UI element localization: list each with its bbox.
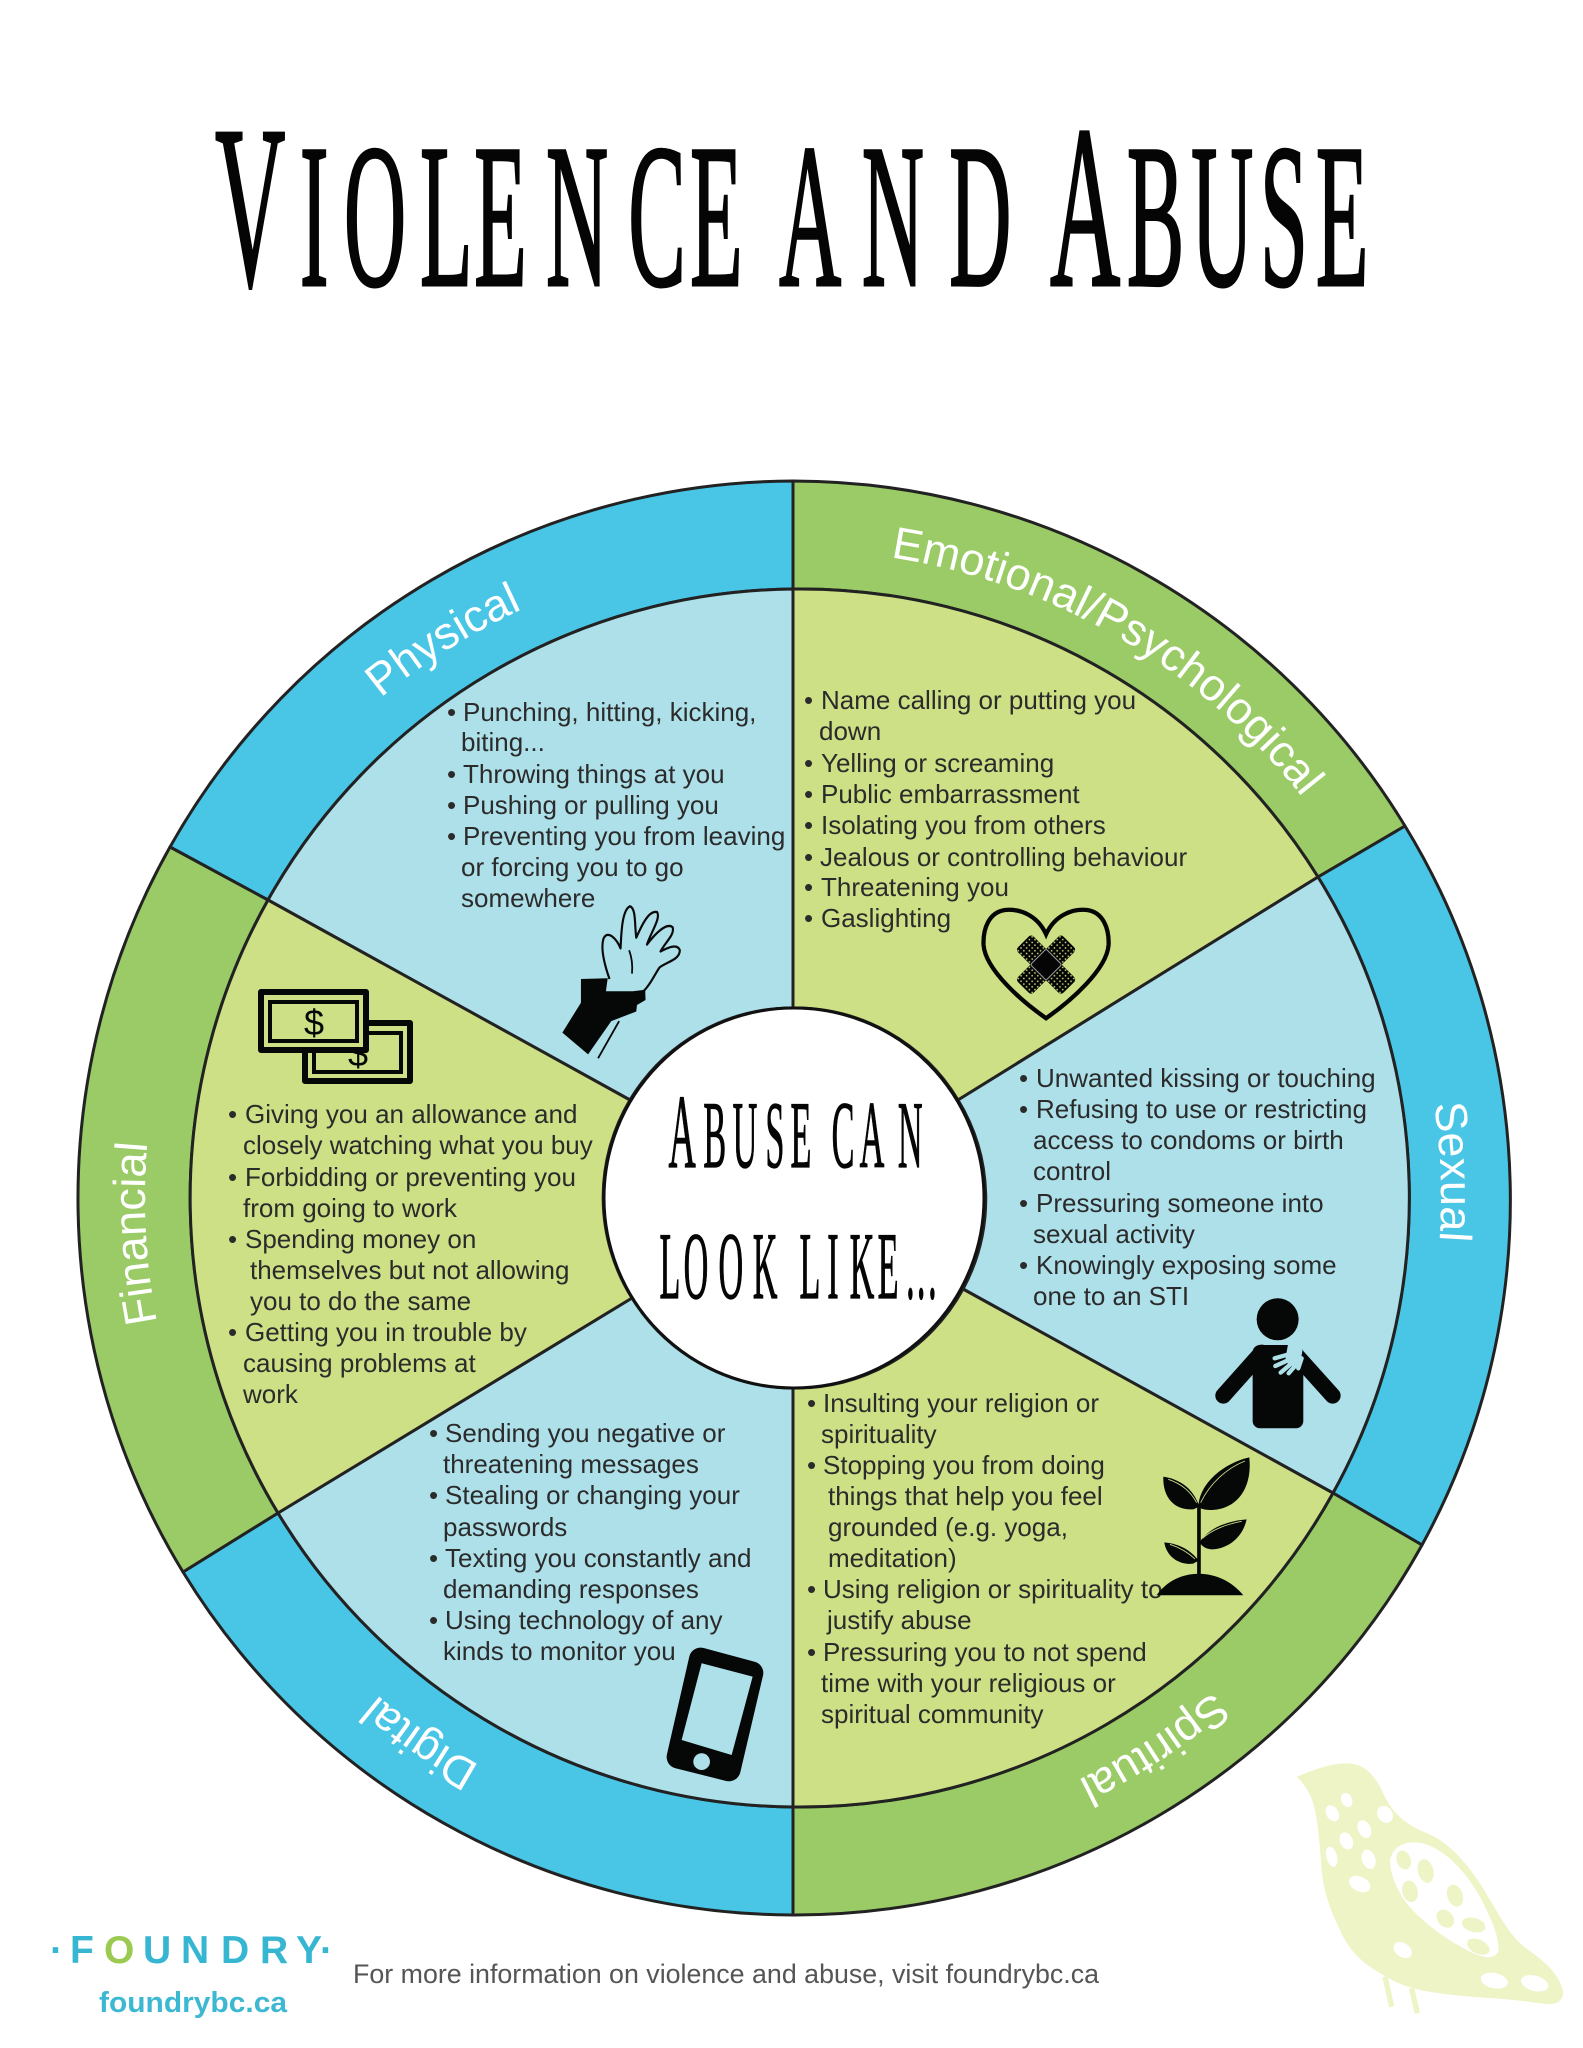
panel: physical: •	[447, 821, 456, 851]
title	[215, 79, 1368, 336]
panel: sexual: Sexual	[1435, 1104, 1472, 1240]
panel: financial: themselves but not allowing	[250, 1255, 569, 1285]
centre hub: LOOK LIKE...	[660, 1214, 937, 1319]
panel: spiritual: Insulting your religion or	[823, 1388, 1099, 1418]
title: V	[215, 79, 285, 336]
panel: emotional/psychological: •	[804, 685, 813, 715]
panel: financial	[76, 846, 632, 1574]
title: IOLENCE AND	[300, 104, 1030, 331]
panel: emotional/psychological: Jealous or controlling behaviour	[820, 842, 1187, 872]
panel: sexual: Refusing to use or restricting	[1036, 1094, 1367, 1124]
panel: spiritual: •	[807, 1574, 816, 1604]
panel: digital	[182, 1300, 793, 1916]
panel: emotional/psychological: •	[804, 842, 813, 872]
panel: financial: closely watching what you buy	[243, 1130, 593, 1160]
foundry logo: foundrybc.ca	[99, 1987, 288, 2019]
panel: spiritual: grounded (e.g. yoga,	[828, 1512, 1068, 1542]
panel: sexual: Knowingly exposing some	[1036, 1250, 1337, 1280]
centre hub: A	[669, 1075, 696, 1191]
foundry logo	[50, 1929, 333, 2019]
panel: emotional/psychological: •	[804, 903, 813, 933]
panel: physical: Punching, hitting, kicking,	[463, 697, 756, 727]
panel: digital: •	[429, 1418, 438, 1448]
panel: spiritual: time with your religious or	[821, 1668, 1116, 1698]
panel: emotional/psychological: Name calling or putting you	[821, 685, 1136, 715]
panel: financial: work	[242, 1379, 299, 1409]
panel: spiritual: meditation)	[828, 1543, 957, 1573]
panel: spiritual: justify abuse	[826, 1605, 972, 1635]
panel: financial: Spending money on	[245, 1224, 476, 1254]
panel: financial: causing problems at	[243, 1348, 476, 1378]
panel: physical: Pushing or pulling you	[463, 790, 719, 820]
panel: digital: •	[429, 1543, 438, 1573]
panel: sexual: control	[1033, 1156, 1111, 1186]
centre hub	[604, 1008, 984, 1388]
panel: physical: Physical	[364, 580, 520, 696]
panel: financial: •	[228, 1224, 237, 1254]
panel: financial: Financial	[112, 1144, 156, 1324]
panel: emotional/psychological: •	[804, 748, 813, 778]
panel: physical: •	[447, 790, 456, 820]
panel: physical: biting...	[461, 727, 545, 757]
panel: emotional/psychological: Emotional/Psychological	[894, 527, 1326, 795]
panel: physical: somewhere	[461, 883, 595, 913]
panel: financial: you to do the same	[250, 1286, 471, 1316]
title: A	[1050, 79, 1120, 336]
panel: emotional/psychological: Public embarrassment	[821, 779, 1080, 809]
foundry logo: ·F OUNDRY·	[50, 1929, 333, 1972]
panel: physical	[168, 480, 793, 1098]
icon: bird watermark	[1297, 1763, 1563, 2013]
panel: emotional/psychological: •	[804, 872, 813, 902]
panel: spiritual: Spiritual	[1080, 1696, 1228, 1808]
panel: spiritual: •	[807, 1637, 816, 1667]
panel: spiritual	[793, 1288, 1424, 1916]
panel: physical: •	[447, 759, 456, 789]
panel: sexual: Pressuring someone into	[1036, 1188, 1324, 1218]
panel: emotional/psychological: Threatening you	[821, 872, 1009, 902]
panel: digital: Stealing or changing your	[445, 1480, 740, 1510]
panel: sexual: •	[1019, 1188, 1028, 1218]
panel: financial: •	[228, 1099, 237, 1129]
panel: emotional/psychological: Gaslighting	[821, 903, 951, 933]
panel: sexual: one to an STI	[1033, 1281, 1189, 1311]
panel: physical: Throwing things at you	[463, 759, 725, 789]
panel: spiritual: •	[807, 1450, 816, 1480]
panel: financial: $	[348, 1033, 368, 1074]
panel: physical: or forcing you to go	[461, 852, 684, 882]
panel: financial: Getting you in trouble by	[245, 1317, 527, 1347]
panel: financial: $	[304, 1002, 324, 1043]
panel: sexual: •	[1019, 1250, 1028, 1280]
panel: sexual: sexual activity	[1033, 1219, 1195, 1249]
panel: financial: •	[228, 1162, 237, 1192]
title: BUSE	[1127, 104, 1368, 331]
panel: digital: Using technology of any	[445, 1605, 723, 1635]
centre hub: BUSE CAN	[703, 1083, 923, 1188]
panel: physical: •	[447, 697, 456, 727]
panel: digital: Sending you negative or	[445, 1418, 726, 1448]
panel: spiritual: •	[807, 1388, 816, 1418]
panel: emotional/psychological: Isolating you from others	[821, 810, 1106, 840]
panel: financial: •	[228, 1317, 237, 1347]
panel: financial: Giving you an allowance and	[245, 1099, 577, 1129]
panel: sexual	[958, 824, 1512, 1546]
panel: emotional/psychological: Yelling or screaming	[821, 748, 1054, 778]
panel: spiritual: things that help you feel	[828, 1481, 1103, 1511]
panel: financial: Forbidding or preventing you	[245, 1162, 576, 1192]
panel: digital: Digital	[358, 1696, 476, 1790]
panel: spiritual: Using religion or spirituality to	[823, 1574, 1163, 1604]
footer note: For more information on violence and abuse, visit foundrybc.ca	[353, 1959, 1100, 1989]
panel: spiritual: Pressuring you to not spend	[823, 1637, 1147, 1667]
panel: sexual: •	[1019, 1063, 1028, 1093]
panel: digital: •	[429, 1605, 438, 1635]
panel: digital: threatening messages	[443, 1449, 699, 1479]
panel: sexual: Unwanted kissing or touching	[1036, 1063, 1376, 1093]
panel: physical: Preventing you from leaving	[463, 821, 785, 851]
panel: emotional/psychological: •	[804, 810, 813, 840]
panel: sexual: access to condoms or birth	[1033, 1125, 1344, 1155]
panel: spiritual: spiritual community	[821, 1699, 1044, 1729]
panel: digital: Texting you constantly and	[445, 1543, 751, 1573]
panel: digital: demanding responses	[443, 1574, 699, 1604]
panel: financial: from going to work	[243, 1193, 458, 1223]
panel: emotional/psychological	[793, 480, 1406, 1098]
panel: spiritual: spirituality	[821, 1419, 937, 1449]
panel: sexual: •	[1019, 1094, 1028, 1124]
panel: digital: •	[429, 1480, 438, 1510]
panel: emotional/psychological: down	[819, 716, 881, 746]
panel: digital: passwords	[443, 1512, 567, 1542]
panel: spiritual: Stopping you from doing	[823, 1450, 1105, 1480]
panel: digital: kinds to monitor you	[443, 1636, 676, 1666]
panel: emotional/psychological: •	[804, 779, 813, 809]
